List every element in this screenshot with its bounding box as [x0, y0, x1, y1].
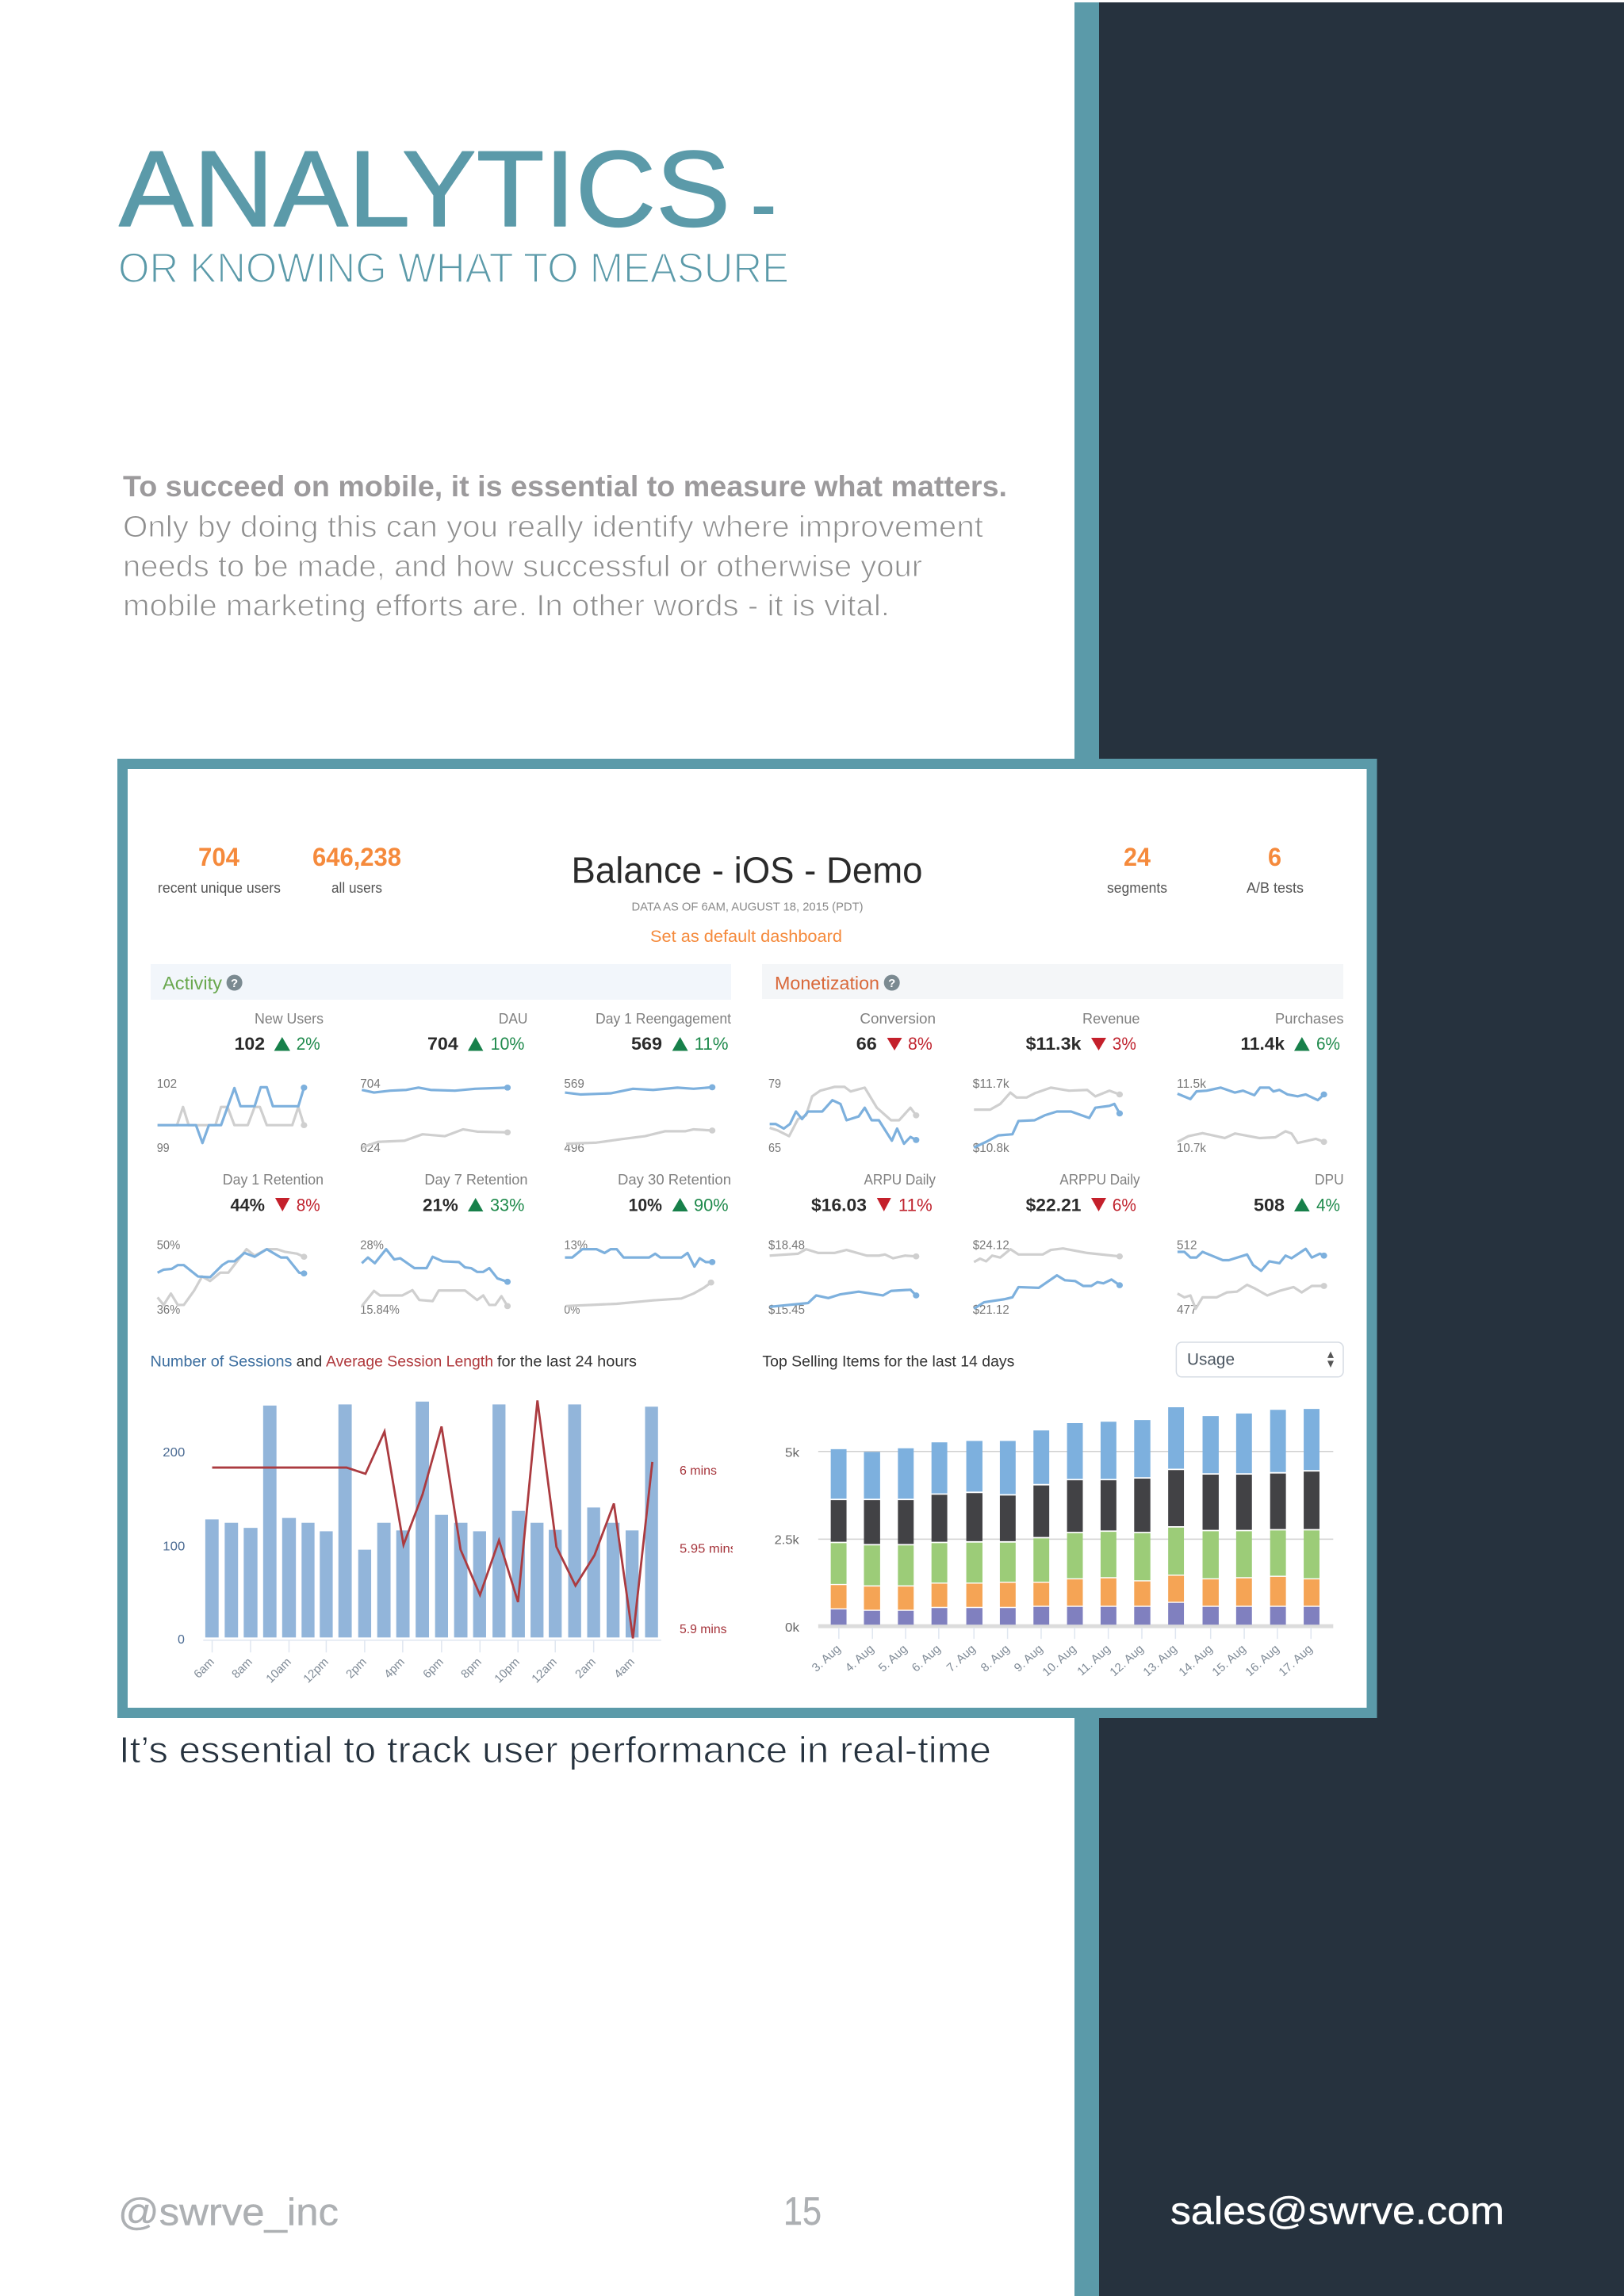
metric: Day 1 Reengagement [564, 1011, 731, 1155]
chart heading: sessions: Number of Sessions [151, 1354, 292, 1371]
caption: It’s essential to track user performance in real-time [119, 1729, 991, 1770]
value axis labels: 5k [785, 1446, 800, 1460]
metric: Day 7 Retention: 15.84% [360, 1303, 400, 1317]
section header: Monetization [762, 964, 1343, 999]
metric: Day 1 Retention: 44% [230, 1196, 265, 1215]
date labels [810, 1642, 1316, 1679]
header stat: recent unique users: recent unique users [158, 880, 281, 896]
hour labels: 8am [229, 1655, 255, 1681]
date labels: 10. Aug [1040, 1642, 1079, 1679]
metric: New Users: 102 [157, 1077, 177, 1091]
metric: New Users: 102 [235, 1034, 265, 1054]
stacked bars [831, 1407, 1320, 1624]
date labels: 5. Aug [876, 1642, 910, 1674]
footer: email: sales@swrve.com [1170, 2191, 1504, 2233]
section header: Monetization: Monetization [775, 973, 879, 993]
metric: Conversion: Conversion [860, 1011, 936, 1027]
footer: social handle: @swrve_inc [118, 2192, 339, 2234]
metric: DAU: 704 [427, 1034, 459, 1054]
section header: Activity: ? [231, 977, 238, 990]
hour labels: 12pm [301, 1655, 331, 1686]
right axis labels: 6 mins [680, 1464, 717, 1478]
metric: ARPPU Daily: $22.21 [1026, 1196, 1082, 1215]
metric: Day 7 Retention: 33% [490, 1196, 524, 1215]
hour labels: 4pm [381, 1655, 408, 1681]
metric: New Users: 99 [157, 1142, 170, 1155]
metric: DPU [1177, 1172, 1344, 1317]
hour labels: 6pm [420, 1655, 446, 1681]
header stat: segments: 24 [1124, 843, 1151, 871]
header stat: A/B tests: A/B tests [1247, 880, 1304, 896]
header stat: all users [312, 843, 401, 896]
metric: Day 1 Reengagement: 569 [564, 1077, 584, 1091]
bar and line chart: sessions [163, 1400, 737, 1686]
metric: DPU: 508 [1254, 1196, 1285, 1215]
hour labels: 2pm [343, 1655, 370, 1681]
dashboard heading [571, 850, 923, 946]
metric: DPU: 4% [1316, 1196, 1340, 1215]
hour labels [191, 1655, 638, 1686]
metric: Revenue: $10.8k [973, 1142, 1009, 1155]
chart heading: sessions: for the last 24 hours [497, 1354, 637, 1371]
dropdown: Usage: Usage [1187, 1350, 1235, 1368]
metric: New Users [157, 1011, 324, 1155]
metric: Purchases: 11.5k [1177, 1077, 1206, 1091]
dashboard heading: Set as default dashboard [650, 928, 842, 946]
date labels: 3. Aug [810, 1642, 844, 1674]
title: - [751, 170, 776, 240]
metric: Purchases [1177, 1011, 1344, 1155]
metric: Revenue [973, 1011, 1140, 1155]
session bars [205, 1402, 658, 1637]
metric: Day 30 Retention: 13% [564, 1239, 588, 1253]
metric: Conversion: 65 [768, 1142, 781, 1155]
metric: Day 1 Reengagement: 569 [631, 1034, 662, 1054]
dark sidebar [1074, 2, 1624, 2296]
metric: DPU: 512 [1177, 1239, 1197, 1253]
chart heading: sessions [151, 1354, 637, 1371]
metric: Day 30 Retention: 0% [564, 1303, 580, 1317]
subtitle: OR KNOWING WHAT TO MEASURE [118, 245, 789, 292]
date labels: 6. Aug [910, 1642, 944, 1674]
intro text block: mobile marketing efforts are. In other words - it is vital. [123, 590, 890, 623]
metric: Day 1 Reengagement: Day 1 Reengagement [596, 1011, 731, 1027]
header stat: segments [1107, 843, 1167, 896]
header stat: recent unique users [158, 843, 281, 896]
right axis labels: 5.95 mins [680, 1543, 737, 1556]
metric: Day 1 Reengagement: 11% [695, 1034, 729, 1054]
panel: dashboard screenshot [122, 764, 1372, 1712]
chart heading: sessions: Average Session Length [326, 1354, 493, 1371]
hour labels: 10pm [492, 1655, 523, 1686]
metric: ARPU Daily: ARPU Daily [864, 1172, 936, 1188]
metric: ARPPU Daily: 6% [1113, 1196, 1136, 1215]
header stat: A/B tests [1247, 843, 1304, 896]
header stat: all users: 646,238 [312, 843, 401, 871]
date labels: 11. Aug [1074, 1642, 1113, 1678]
metric: DAU: 704 [360, 1077, 381, 1091]
intro text block [123, 470, 1007, 623]
metric: Day 1 Reengagement: 496 [564, 1142, 584, 1155]
hour labels: 6am [191, 1655, 217, 1681]
x axis line and ticks [203, 1640, 661, 1652]
session length line [213, 1400, 653, 1638]
date labels: 12. Aug [1107, 1642, 1147, 1679]
grid lines and ticks [818, 1452, 1333, 1639]
metric: DAU [360, 1011, 528, 1155]
hour labels: 2am [573, 1655, 599, 1681]
title: ANALYTICS [119, 128, 730, 249]
metric: New Users: 2% [297, 1034, 320, 1054]
left axis labels [163, 1446, 185, 1647]
date labels: 7. Aug [944, 1642, 979, 1674]
metric: Day 30 Retention: Day 30 Retention [618, 1172, 731, 1188]
stacked bar chart: top selling items [775, 1407, 1333, 1679]
metric: ARPU Daily: $16.03 [811, 1196, 867, 1215]
metric: Purchases: 10.7k [1177, 1142, 1206, 1155]
chart heading: sessions: and [297, 1354, 322, 1371]
right axis labels [680, 1464, 737, 1636]
metric: ARPPU Daily: ARPPU Daily [1059, 1172, 1140, 1188]
date labels: 9. Aug [1012, 1642, 1046, 1674]
left axis labels: 0 [178, 1633, 185, 1647]
date labels: 17. Aug [1276, 1642, 1316, 1679]
metric: ARPU Daily: 11% [898, 1196, 933, 1215]
metric: Day 1 Retention: 50% [157, 1239, 180, 1253]
metric: Purchases: 11.4k [1240, 1034, 1285, 1054]
hour labels: 10am [263, 1655, 294, 1686]
metric: Day 1 Retention: Day 1 Retention [223, 1172, 324, 1188]
metric: Day 7 Retention: 21% [423, 1196, 458, 1215]
metric: Day 1 Retention: 8% [297, 1196, 320, 1215]
metric: Conversion: 8% [908, 1034, 933, 1054]
metric: ARPPU Daily: $24.12 [973, 1239, 1009, 1253]
dashboard heading: DATA AS OF 6AM, AUGUST 18, 2015 (PDT) [631, 901, 863, 913]
date labels: 8. Aug [979, 1642, 1013, 1674]
date labels: 15. Aug [1209, 1642, 1249, 1679]
metric: Day 7 Retention [360, 1172, 528, 1317]
metric: ARPPU Daily: $21.12 [973, 1303, 1009, 1317]
metric: Purchases: 6% [1316, 1034, 1340, 1054]
metric: DPU: DPU [1315, 1172, 1344, 1188]
chart heading: top selling items: Top Selling Items for the last 14 days [762, 1354, 1014, 1371]
metric: New Users: New Users [255, 1011, 324, 1027]
metric: Revenue: $11.7k [973, 1077, 1009, 1091]
value axis labels: 2.5k [775, 1533, 800, 1548]
metric: Day 7 Retention: Day 7 Retention [424, 1172, 528, 1188]
intro text block: Only by doing this can you really identify where improvement [123, 511, 983, 544]
date labels: 16. Aug [1243, 1642, 1282, 1679]
dashboard heading: Balance - iOS - Demo [571, 850, 923, 891]
metric: Day 1 Retention: 36% [157, 1303, 180, 1317]
metric: Day 1 Retention [157, 1172, 324, 1317]
intro text block: To succeed on mobile, it is essential to measure what matters. [123, 470, 1007, 503]
right axis labels: 5.9 mins [680, 1623, 726, 1636]
metric: Day 30 Retention: 90% [694, 1196, 729, 1215]
section header: Monetization: ? [888, 977, 895, 990]
section header: Activity [151, 964, 731, 1000]
metric: Revenue: $11.3k [1026, 1034, 1082, 1054]
metric: Revenue: 3% [1113, 1034, 1136, 1054]
metric: Conversion [768, 1011, 936, 1155]
header stat: A/B tests: 6 [1268, 843, 1281, 871]
metric: ARPU Daily [768, 1172, 936, 1317]
dropdown: Usage [1176, 1342, 1343, 1377]
intro text block: needs to be made, and how successful or otherwise your [123, 550, 922, 584]
header stat: recent unique users: 704 [198, 843, 239, 871]
hour labels: 4am [611, 1655, 638, 1681]
section header: Activity: Activity [163, 973, 223, 993]
left axis labels: 200 [163, 1446, 185, 1460]
metric: Day 30 Retention [564, 1172, 731, 1317]
metric: Conversion: 66 [856, 1034, 877, 1054]
hour labels: 12am [529, 1655, 560, 1686]
metric: Conversion: 79 [768, 1077, 781, 1091]
hour labels: 8pm [458, 1655, 485, 1681]
metric: Purchases: Purchases [1275, 1011, 1344, 1027]
footer: page number: 15 [783, 2189, 822, 2233]
metric: ARPPU Daily [973, 1172, 1140, 1317]
metric: Day 7 Retention: 28% [360, 1239, 384, 1253]
metric: Day 30 Retention: 10% [629, 1196, 662, 1215]
left axis labels: 100 [163, 1540, 185, 1554]
metric: DPU: 477 [1177, 1303, 1197, 1317]
metric: ARPU Daily: $18.48 [768, 1239, 805, 1253]
metric: DAU: 624 [360, 1142, 381, 1155]
metric: DAU: 10% [491, 1034, 524, 1054]
metric: DAU: DAU [499, 1011, 528, 1027]
value axis labels: 0k [785, 1621, 800, 1635]
header stat: all users: all users [331, 880, 382, 896]
metric: Revenue: Revenue [1082, 1011, 1140, 1027]
date labels: 13. Aug [1140, 1642, 1180, 1679]
value axis labels [775, 1446, 800, 1635]
date labels: 14. Aug [1176, 1642, 1216, 1679]
date labels: 4. Aug [843, 1642, 877, 1674]
header stat: segments: segments [1107, 880, 1167, 896]
metric: ARPU Daily: $15.45 [768, 1303, 805, 1317]
